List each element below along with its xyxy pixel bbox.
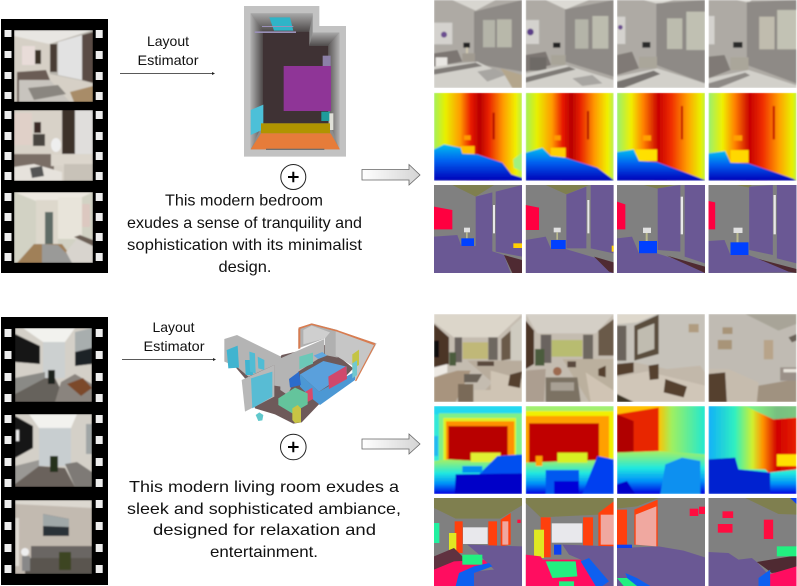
segmentation view 1 bbox=[434, 498, 522, 586]
film frame: living room second view bbox=[15, 414, 92, 487]
text prompt: bedroom: This modern bedroom bbox=[165, 192, 323, 210]
film frame: bed headboard and art bbox=[14, 110, 93, 181]
label: Layout Estimator (top) bbox=[138, 33, 199, 68]
depth view 1 bbox=[434, 92, 522, 181]
3D layout: living room perspective view bbox=[224, 323, 377, 424]
rgb view 3 bbox=[617, 314, 705, 402]
segmentation view 4 bbox=[708, 185, 796, 273]
label: Layout Estimator (top): Layout bbox=[147, 33, 189, 49]
text prompt: bedroom: exudes a sense of tranquility and bbox=[127, 215, 362, 232]
rgb view 4 bbox=[708, 314, 796, 402]
segmentation view 3 bbox=[617, 498, 705, 586]
label: Layout Estimator (bottom): Estimator bbox=[144, 338, 205, 354]
arrow: frames to layout (top) bbox=[120, 72, 215, 75]
plus symbol (bottom) bbox=[280, 434, 306, 460]
text prompt: living room: This modern living room exudes a bbox=[129, 479, 399, 496]
label: Layout Estimator (top): Estimator bbox=[138, 52, 199, 68]
rgb view 3 bbox=[617, 0, 705, 88]
rgb view 2 bbox=[526, 0, 614, 88]
panel: living room output grid bbox=[434, 314, 796, 586]
block arrow (top) bbox=[362, 164, 420, 185]
rgb view 1 bbox=[434, 0, 522, 88]
arrow: frames to layout (bottom) bbox=[122, 358, 216, 361]
text prompt: bedroom bbox=[127, 192, 363, 276]
depth view 3 bbox=[617, 92, 705, 181]
label: Layout Estimator (bottom): Layout bbox=[152, 319, 195, 335]
3D layout: bedroom top view bbox=[244, 6, 346, 157]
film frame: living room sofa and painting bbox=[15, 500, 92, 574]
text prompt: living room bbox=[127, 479, 401, 561]
segmentation view 2 bbox=[526, 498, 614, 586]
filmstrip: living room reference frames bbox=[1, 317, 108, 585]
filmstrip: bedroom reference frames bbox=[1, 19, 108, 273]
block arrow (bottom) bbox=[362, 434, 420, 454]
rgb view 4 bbox=[708, 0, 796, 88]
film frame: hallway view bbox=[14, 192, 93, 263]
depth view 1 bbox=[434, 406, 522, 494]
depth view 4 bbox=[708, 92, 796, 181]
rgb view 1 bbox=[434, 314, 522, 402]
depth view 3 bbox=[617, 406, 705, 494]
segmentation view 4 bbox=[708, 498, 796, 586]
text prompt: bedroom: design. bbox=[218, 259, 272, 276]
film frame: living room with wall panel bbox=[15, 328, 92, 402]
depth view 4 bbox=[708, 406, 796, 494]
depth view 2 bbox=[526, 92, 614, 181]
segmentation view 1 bbox=[434, 185, 522, 273]
plus symbol (top) bbox=[281, 164, 306, 190]
rgb view 2 bbox=[526, 314, 614, 402]
text prompt: living room: entertainment. bbox=[210, 544, 318, 561]
text prompt: living room: designed for relaxation and bbox=[153, 522, 376, 539]
segmentation view 2 bbox=[526, 185, 614, 273]
text prompt: living room: sleek and sophisticated ambiance, bbox=[127, 501, 401, 518]
depth view 2 bbox=[526, 406, 614, 494]
label: Layout Estimator (bottom) bbox=[144, 319, 205, 354]
segmentation view 3 bbox=[617, 185, 705, 273]
text prompt: bedroom: sophistication with its minimalist bbox=[127, 237, 363, 254]
film frame: bedroom with window bbox=[14, 30, 93, 102]
panel: bedroom output grid bbox=[434, 0, 796, 273]
